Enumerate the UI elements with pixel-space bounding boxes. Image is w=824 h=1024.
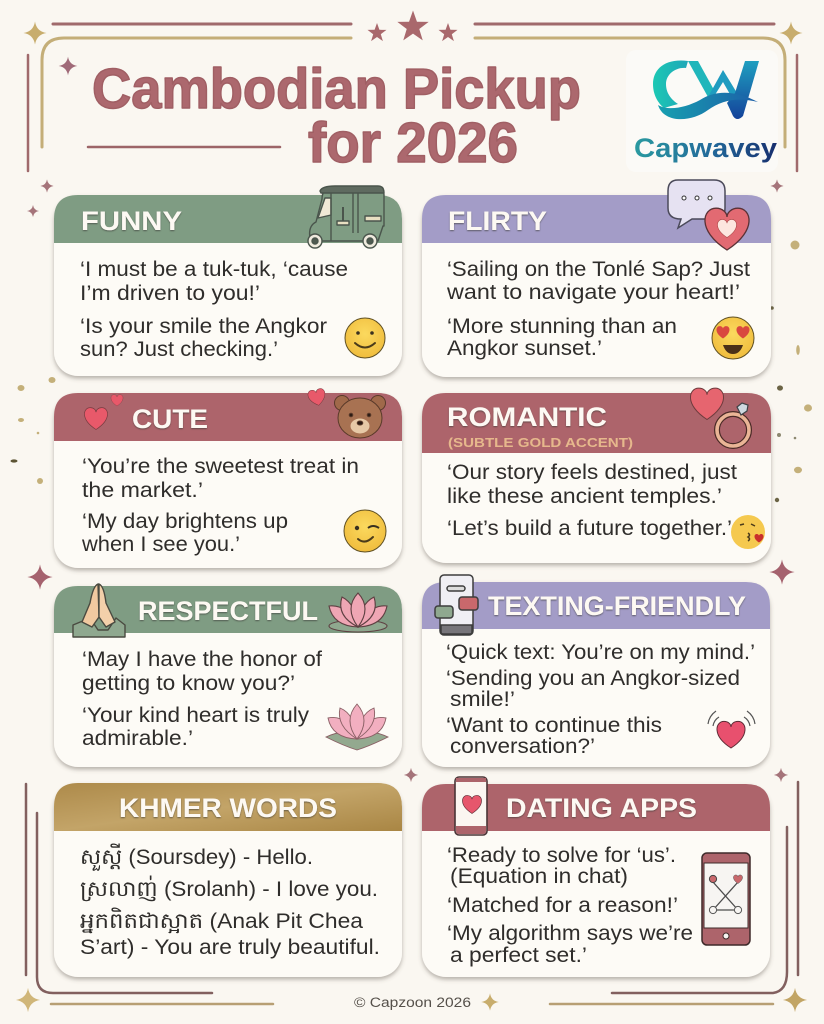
quotes: cute bbox=[81, 454, 359, 556]
quotes: texting-friendly: smile!’ bbox=[450, 687, 515, 711]
logo: Capwavey bbox=[626, 50, 778, 172]
panel: khmer words bbox=[54, 783, 402, 977]
icon: heart and ring bbox=[690, 388, 749, 446]
icon: smiley bbox=[345, 318, 385, 358]
title bbox=[92, 57, 581, 175]
heading: romantic: ROMANTIC bbox=[447, 402, 607, 432]
khmer phrases: ស្រលាញ់ (Srolanh) - I love you. bbox=[80, 875, 378, 902]
khmer phrases: សួស្តី (Soursdey) - Hello. bbox=[80, 843, 313, 871]
icon: teddy bear bbox=[334, 396, 386, 438]
icon: winking emoji bbox=[344, 510, 386, 552]
quotes: cute: the market.’ bbox=[82, 478, 203, 502]
quotes: romantic: ‘Our story feels destined, just bbox=[447, 460, 737, 484]
quotes: dating apps: ‘Matched for a reason!’ bbox=[447, 893, 678, 917]
quotes: respectful: admirable.’ bbox=[82, 726, 193, 750]
quotes: romantic: like these ancient temples.’ bbox=[447, 484, 722, 508]
quotes: dating apps: a perfect set.’ bbox=[450, 943, 587, 967]
quotes: flirty: want to navigate your heart!’ bbox=[446, 280, 740, 304]
khmer phrases: S’art) - You are truly beautiful. bbox=[80, 935, 380, 959]
quotes: texting-friendly: ‘Sending you an Angkor-sized bbox=[446, 666, 740, 690]
khmer phrases bbox=[80, 843, 380, 959]
quotes: cute: ‘You’re the sweetest treat in bbox=[82, 454, 359, 478]
logo: Capwavey: Capwavey bbox=[634, 133, 777, 163]
quotes: funny: I’m driven to you!’ bbox=[80, 281, 260, 305]
panel: romantic bbox=[422, 388, 771, 563]
heading: respectful: RESPECTFUL bbox=[138, 596, 318, 626]
quotes: flirty bbox=[446, 257, 750, 360]
icon: hearts bbox=[84, 388, 327, 430]
panel: dating apps bbox=[422, 777, 770, 977]
quotes: dating apps bbox=[447, 843, 693, 967]
footer credit: © Capzoon 2026 bbox=[354, 995, 471, 1010]
quotes: romantic bbox=[447, 460, 737, 540]
quotes: texting-friendly: ‘Want to continue this bbox=[446, 713, 662, 737]
icon: lotus in header bbox=[329, 593, 387, 632]
quotes: respectful: ‘Your kind heart is truly bbox=[82, 703, 309, 727]
icon: phone with chat bubbles bbox=[435, 575, 478, 635]
quotes: dating apps: ‘Ready to solve for ‘us’. bbox=[447, 843, 676, 867]
quotes: respectful: getting to know you?’ bbox=[82, 671, 295, 695]
quotes: respectful bbox=[82, 647, 322, 750]
panel: texting-friendly bbox=[422, 575, 770, 767]
heading: khmer words: KHMER WORDS bbox=[119, 793, 337, 823]
heading: cute: CUTE bbox=[132, 404, 208, 434]
quotes: romantic: ‘Let’s build a future together.’ bbox=[447, 516, 732, 540]
quotes: funny: ‘I must be a tuk-tuk, ‘cause bbox=[80, 257, 348, 281]
stars at top bbox=[368, 10, 458, 41]
icon: kissing emoji bbox=[731, 515, 765, 549]
quotes: cute: ‘My day brightens up bbox=[82, 509, 288, 533]
icon: lotus bbox=[326, 704, 388, 750]
quotes: dating apps: ‘My algorithm says we’re bbox=[447, 921, 693, 945]
panel: flirty bbox=[422, 180, 771, 377]
icon: phone with match diagram bbox=[702, 853, 750, 945]
quotes: funny bbox=[80, 257, 348, 361]
quotes: flirty: ‘Sailing on the Tonlé Sap? Just bbox=[447, 257, 750, 281]
heading: dating apps: DATING APPS bbox=[506, 793, 697, 823]
heading: flirty: FLIRTY bbox=[448, 206, 547, 236]
icon: tuk-tuk bbox=[308, 186, 384, 248]
icon: phone with heart bbox=[455, 777, 487, 835]
icon: chat bubble and heart bbox=[668, 180, 749, 250]
khmer phrases: អ្នកពិតជាស្អាត (Anak Pit Chea bbox=[80, 907, 363, 934]
quotes: respectful: ‘May I have the honor of bbox=[82, 647, 322, 671]
quotes: dating apps: (Equation in chat) bbox=[450, 864, 628, 888]
panel: funny bbox=[54, 186, 402, 376]
quotes: texting-friendly bbox=[446, 640, 755, 758]
quotes: texting-friendly: conversation?’ bbox=[450, 734, 595, 758]
subheading: gold accent: (SUBTLE GOLD ACCENT) bbox=[448, 435, 633, 450]
gold confetti bbox=[10, 240, 812, 502]
quotes: flirty: ‘More stunning than an bbox=[447, 314, 677, 338]
heading: texting-friendly: TEXTING-FRIENDLY bbox=[488, 591, 746, 621]
quotes: flirty: Angkor sunset.’ bbox=[447, 336, 602, 360]
icon: heart-eyes emoji bbox=[712, 317, 754, 359]
icon: heart with signal waves bbox=[708, 711, 755, 748]
panel: respectful bbox=[54, 584, 402, 767]
heading: funny: FUNNY bbox=[81, 206, 182, 236]
title: Cambodian Pickup bbox=[92, 57, 581, 121]
icon: praying hands bbox=[73, 584, 125, 637]
quotes: funny: sun? Just checking.’ bbox=[80, 337, 278, 361]
panel: cute bbox=[54, 388, 402, 568]
quotes: cute: when I see you.’ bbox=[81, 532, 240, 556]
title: for 2026 bbox=[308, 111, 518, 175]
quotes: texting-friendly: ‘Quick text: You’re on my mind.’ bbox=[446, 640, 755, 664]
quotes: funny: ‘Is your smile the Angkor bbox=[80, 314, 327, 338]
